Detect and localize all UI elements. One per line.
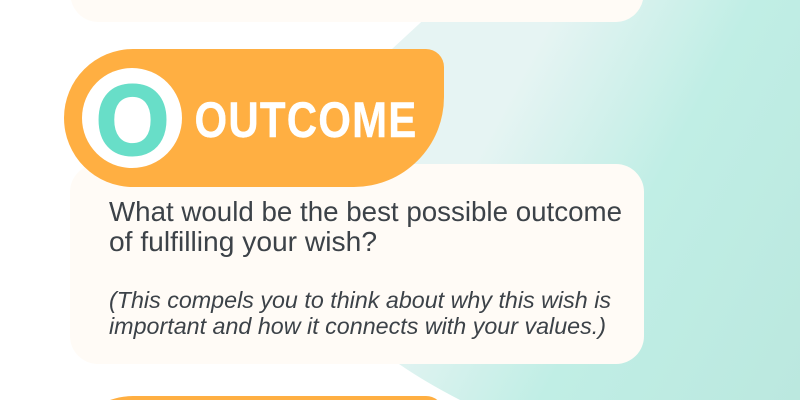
explanatory italic text: important and how it connects with your values.) — [109, 313, 606, 339]
panel: outcome card — [70, 164, 644, 364]
background teal blob — [340, 0, 800, 400]
explanatory italic text — [109, 287, 611, 339]
question text — [109, 196, 622, 257]
heading text: OUTCOME — [194, 92, 416, 148]
heading badge: outcome — [64, 49, 444, 187]
explanatory italic text: (This compels you to think about why this wish is — [109, 287, 611, 313]
icon: letter O in white circle: O — [96, 64, 169, 176]
panel: previous card — [71, 0, 643, 22]
question text: What would be the best possible outcome — [109, 196, 622, 227]
next heading badge — [110, 396, 437, 400]
question text: of fulfilling your wish? — [109, 226, 377, 257]
